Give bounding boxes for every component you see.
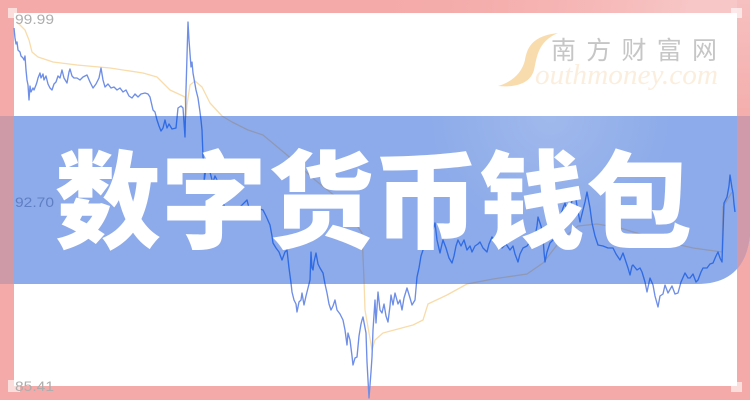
watermark logo [498,31,718,91]
logo domain: outhmoney.com [535,60,718,91]
title: 数字货币钱包 [55,117,692,271]
logo chinese name: 南方财富网 [551,31,717,67]
blue title band [0,116,750,284]
moving-average line [18,23,732,350]
axis label: middle: 92.70 [15,194,54,210]
axis label: bottom: 85.41 [15,378,54,394]
logo swoosh [498,33,558,86]
axis label: top: 99.99 [15,11,54,27]
